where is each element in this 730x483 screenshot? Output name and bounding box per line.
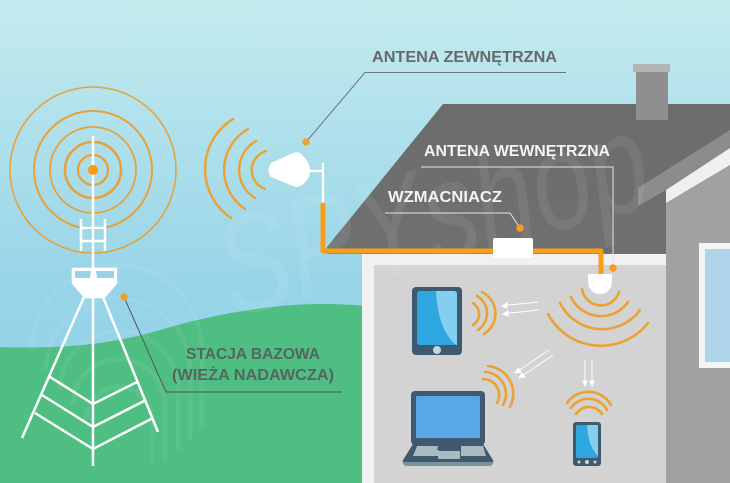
tablet waves	[473, 292, 495, 334]
tower centre dot	[88, 165, 98, 175]
tower	[22, 136, 158, 466]
callout: base station	[120, 293, 342, 392]
wireless arrows to phone	[583, 360, 594, 386]
laptop waves	[483, 366, 513, 407]
side wall and gable	[638, 130, 730, 483]
callout: amplifier	[385, 189, 524, 232]
callout: outdoor antenna: ANTENA ZEWNĘTRZNA	[372, 49, 557, 66]
callout: base station: STACJA BAZOWA	[186, 346, 320, 363]
phone	[573, 422, 601, 466]
window	[699, 243, 730, 368]
phone waves	[567, 392, 611, 414]
front wall	[362, 254, 666, 483]
chimney	[633, 64, 670, 120]
outdoor antenna waves	[205, 119, 266, 218]
watermark waves	[32, 265, 202, 465]
signal circles	[10, 87, 176, 253]
callout: indoor antenna: ANTENA WEWNĘTRZNA	[424, 143, 610, 160]
roof	[327, 104, 730, 254]
wireless arrows to laptop	[515, 350, 553, 378]
tablet	[412, 287, 462, 355]
green hill	[0, 304, 365, 483]
wireless arrows to tablet	[502, 302, 539, 316]
amplifier	[493, 238, 533, 258]
outdoor antenna	[268, 152, 323, 204]
indoor antenna waves	[548, 289, 648, 346]
callout: outdoor antenna	[302, 49, 566, 146]
orange cable	[323, 205, 601, 273]
callout: base station: (WIEŻA NADAWCZA)	[172, 366, 334, 384]
house	[327, 64, 730, 483]
callout: indoor antenna	[421, 143, 617, 272]
callout: amplifier: WZMACNIACZ	[388, 189, 502, 206]
laptop	[403, 391, 493, 466]
indoor antenna	[588, 274, 612, 294]
